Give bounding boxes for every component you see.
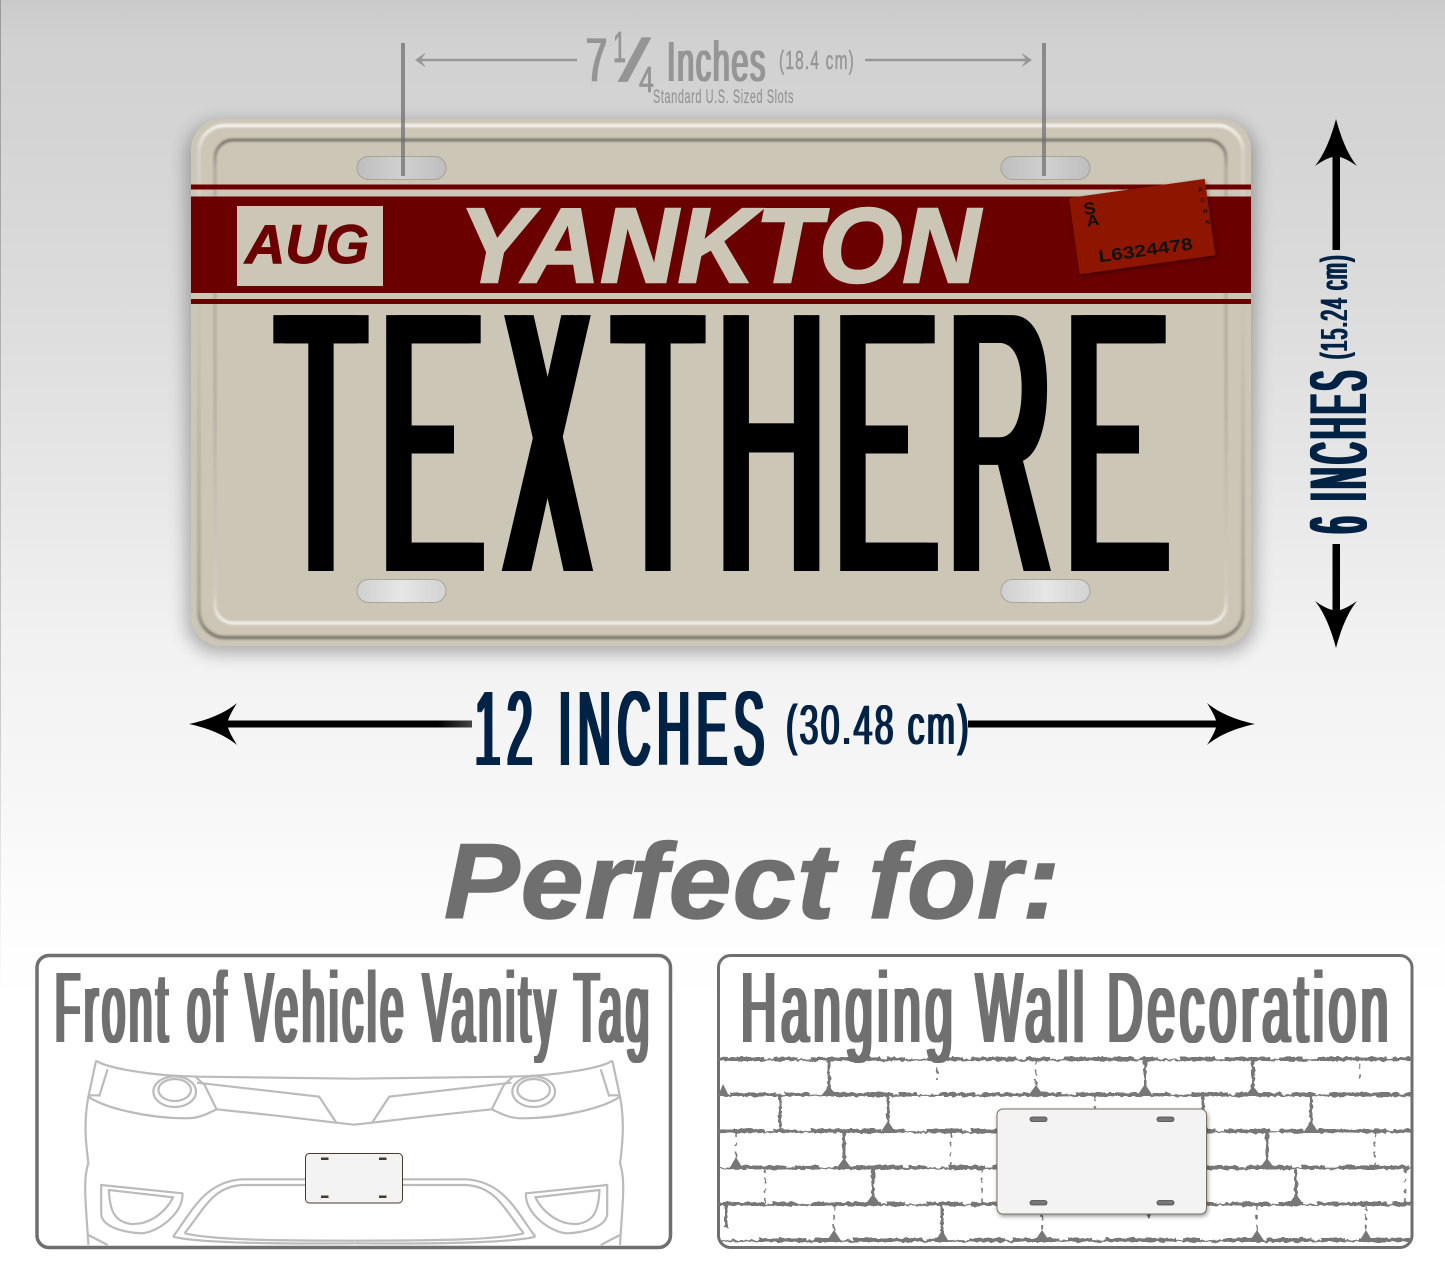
slot spacing label: 1 (613, 23, 626, 72)
heading: Perfect for: Perfect for: (444, 821, 1061, 941)
county name: YANKTON: YANKTON (459, 187, 982, 305)
right gray arrow (865, 52, 1032, 68)
month box: AUG (237, 206, 383, 286)
slot spacing label: / (618, 27, 652, 94)
slot spacing label: Standard U.S. Sized Slots (653, 87, 794, 108)
red band (191, 196, 1251, 293)
plate number: TEXTHERE: X (498, 234, 578, 650)
width arrow right (968, 703, 1255, 745)
text: (15.24 cm) (1314, 254, 1356, 359)
brick wall (718, 1059, 1412, 1242)
plate number: TEXTHERE: R (942, 234, 1046, 650)
slot spacing label: (18.4 cm) (779, 45, 855, 75)
height label (1294, 254, 1384, 533)
height label: 6 INCHES (1294, 367, 1384, 533)
registration sticker: A (1085, 212, 1101, 231)
top stripe (191, 184, 1251, 190)
slot spacing label: 4 (639, 59, 654, 100)
registration sticker: H (1203, 209, 1208, 215)
hanging plate on wall (997, 1109, 1206, 1214)
plate number: TEXTHERE (270, 234, 1169, 650)
left half (85, 1061, 354, 1245)
bottom stripe (191, 299, 1251, 304)
plate number: TEXTHERE: E (827, 234, 934, 650)
panel: wall decoration (718, 952, 1412, 1248)
plate number: TEXTHERE: E (1058, 234, 1165, 650)
plate number: TEXTHERE: T (270, 234, 360, 650)
plate number: TEXTHERE: E (373, 234, 480, 650)
width label: (30.48 cm) (786, 693, 971, 756)
registration sticker: C (1200, 198, 1206, 205)
slot spacing label (586, 23, 855, 108)
registration sticker: N (1205, 220, 1211, 226)
small plate on bumper (306, 1154, 402, 1203)
car front outline (85, 1061, 623, 1245)
mounting slots (357, 156, 1090, 602)
left gray arrow (415, 52, 577, 68)
panel: front of vehicle (37, 952, 670, 1248)
height arrow down (1315, 544, 1357, 648)
license plate (187, 119, 1255, 653)
month box: AUG: AUG (243, 213, 369, 275)
slot spacing label: 7 (586, 26, 607, 95)
registration sticker: S (1082, 198, 1097, 219)
registration sticker: L6324478 (1097, 234, 1194, 266)
width arrow left (189, 703, 472, 745)
plate number: TEXTHERE: H (711, 234, 820, 650)
right half (354, 1061, 623, 1245)
slot spacing dimension (401, 23, 1046, 176)
width label: 12 INCHES (475, 670, 771, 788)
left page edge (0, 0, 1, 1000)
registration sticker: A (1198, 187, 1204, 194)
slot spacing label: Inches (667, 30, 767, 94)
registration sticker (1069, 179, 1215, 274)
plate number: TEXTHERE: T (607, 234, 697, 650)
height arrow up (1315, 119, 1357, 250)
